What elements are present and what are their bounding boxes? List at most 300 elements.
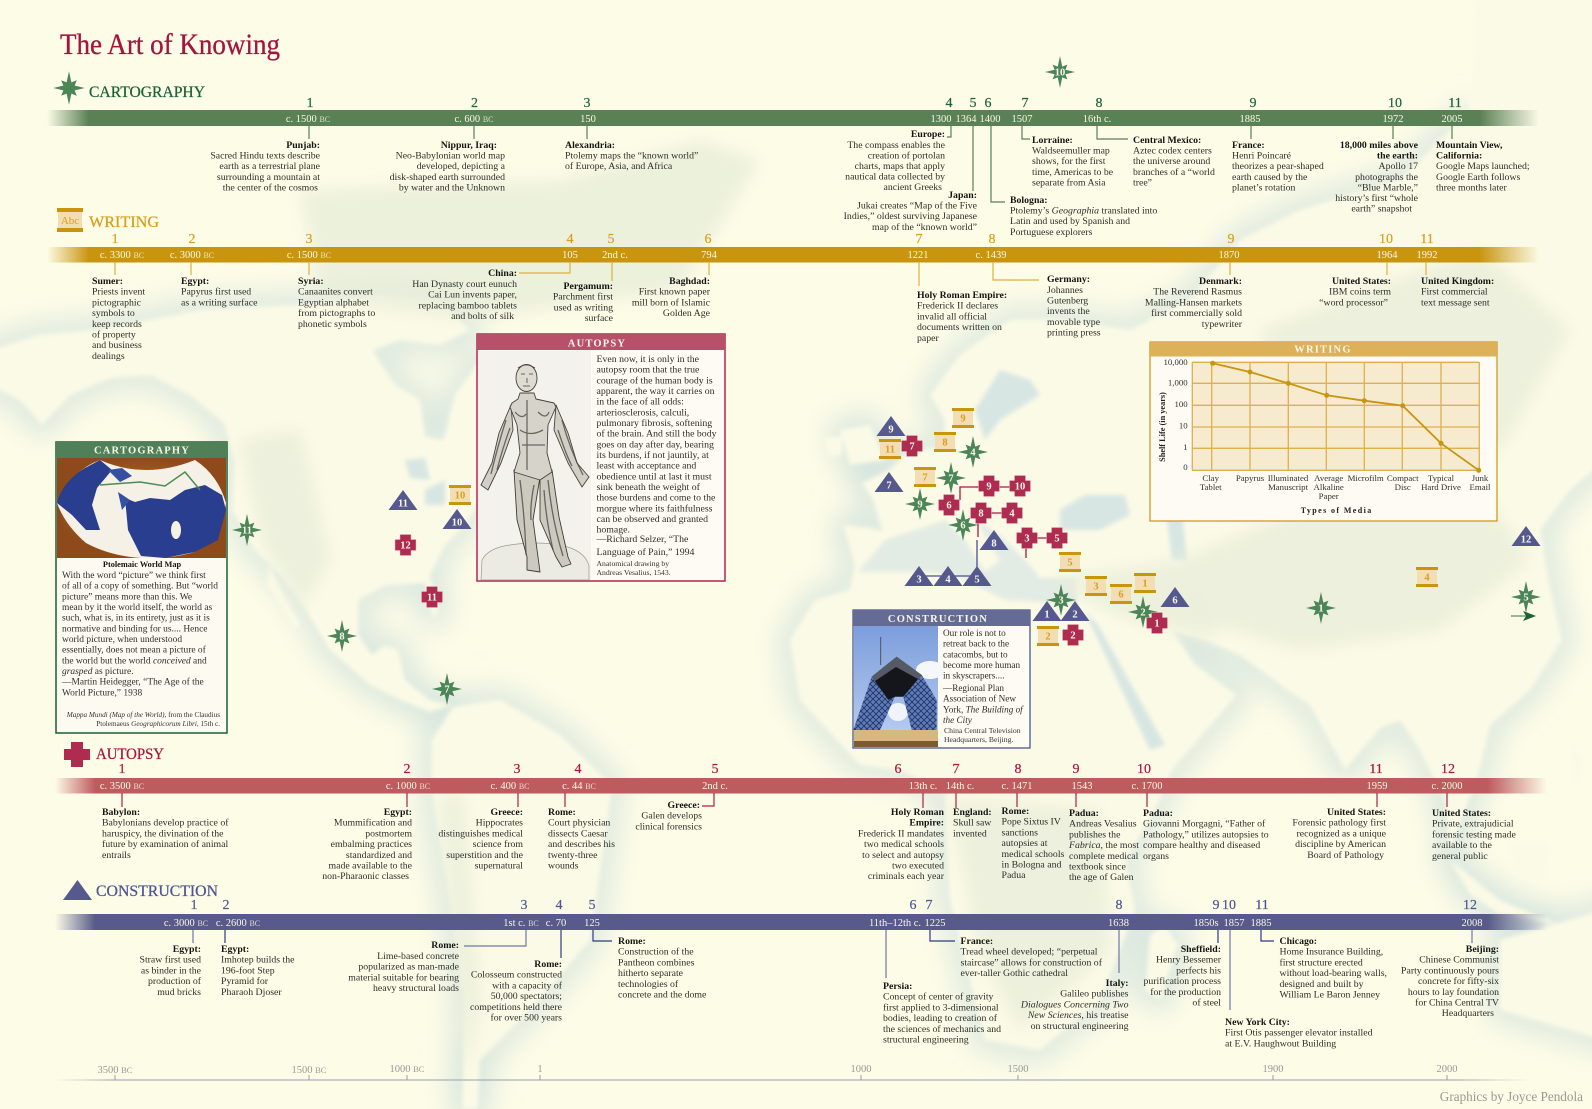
construction triangles: 1 xyxy=(1044,610,1050,620)
event: Persia xyxy=(883,930,1001,1046)
numbers and dates: 11 xyxy=(1369,762,1383,777)
cartography stars: 6 xyxy=(960,520,966,532)
panel header: writing: WRITING xyxy=(1294,344,1352,356)
event: Bologna: Ptolemy’s Geographia translated into xyxy=(1010,206,1157,217)
quote: Selzer: homage. xyxy=(596,525,630,536)
event: Lorraine xyxy=(1022,126,1114,188)
event: Denmark: The Reverend Rasmus xyxy=(1153,287,1242,298)
event: Holy Roman Empire autopsy: Empire: xyxy=(909,818,944,829)
event: United States writing: IBM coins term xyxy=(1329,287,1391,298)
time axis: 3500 BC xyxy=(98,1065,133,1076)
event: Persia: structural engineering xyxy=(883,1034,969,1046)
writing scrolls: 2 xyxy=(1045,632,1051,642)
event: Egypt autopsy: postmortem xyxy=(365,828,412,839)
quote: Regional Plan Association: retreat back to the xyxy=(943,639,1009,649)
event: Chicago xyxy=(1261,930,1387,1000)
event: Beijing: concrete for fifty-six xyxy=(1418,976,1499,987)
event: Padua Morgagni: Giovanni Morgagni, “Father of xyxy=(1143,819,1266,830)
quote: Heidegger: essentially, does not mean a picture of xyxy=(62,645,207,656)
event: Egypt autopsy: standardized and xyxy=(346,850,412,861)
y axis labels: 0 xyxy=(1183,462,1188,472)
panel header: autopsy xyxy=(477,334,725,350)
event: Mountain View: Mountain View, xyxy=(1436,140,1503,151)
quote: Heidegger: World Picture,” 1938 xyxy=(62,688,143,698)
event: Persia: first applied to 3-dimensional xyxy=(883,1002,999,1013)
numbers and dates: 9 xyxy=(1228,232,1234,247)
event: Sheffield: Sheffield: xyxy=(1181,944,1221,955)
event: Bologna: Latin and used by Spanish and xyxy=(1010,216,1130,227)
event: United Kingdom xyxy=(1421,262,1494,308)
event: China: replacing bamboo tablets xyxy=(419,300,517,311)
event: Punjab: Sacred Hindu texts describe xyxy=(210,151,321,162)
event: France: Henri Poincaré xyxy=(1232,151,1292,162)
numbers and dates: 6 xyxy=(984,96,992,111)
event: Greece Galen: clinical forensics xyxy=(635,821,702,832)
x axis labels: Disc xyxy=(1395,482,1411,492)
construction triangles: 10 xyxy=(452,518,462,528)
numbers and dates xyxy=(100,232,1438,261)
event: Holy Roman Empire autopsy: two executed xyxy=(892,860,944,872)
timeline: writing xyxy=(47,208,1539,362)
event: Sheffield xyxy=(1143,930,1222,1008)
event: Egypt straw xyxy=(140,930,202,998)
event: Punjab: Punjab: xyxy=(286,140,320,151)
time axis: 1000 BC xyxy=(390,1064,425,1075)
writing scrolls: 10 xyxy=(455,490,465,502)
numbers and dates: 2 xyxy=(188,232,196,247)
numbers and dates: c. 1471 xyxy=(1002,781,1032,792)
event: Babylon: future by examination of animal xyxy=(102,839,229,850)
numbers and dates: c. 1000 BC xyxy=(386,781,430,792)
construction triangles: 7 xyxy=(886,480,892,492)
time axis: 1500 xyxy=(1008,1064,1028,1075)
numbers and dates: c. 1439 xyxy=(976,250,1006,261)
event: Holy Roman Empire autopsy: to select and autopsy xyxy=(862,850,944,861)
event: Holy Roman Empire autopsy: criminals each year xyxy=(868,871,945,882)
event: Europe: The compass enables the xyxy=(847,140,946,151)
event: Beijing xyxy=(1401,930,1499,1019)
numbers and dates: 1 xyxy=(306,96,314,111)
cartography stars: 10 xyxy=(1055,68,1065,78)
writing scrolls: 11 xyxy=(885,444,895,456)
event: United Kingdom: First commercial xyxy=(1421,287,1488,298)
event: Babylon: entrails xyxy=(102,850,131,861)
heading: cartography: CARTOGRAPHY xyxy=(89,84,205,101)
writing scrolls: 9 xyxy=(960,414,966,424)
numbers and dates: 1st c. BC xyxy=(503,918,539,929)
numbers and dates xyxy=(100,762,1462,792)
event: United States writing: “word processor” xyxy=(1319,297,1388,308)
event: Rome Sixtus: Pope Sixtus IV xyxy=(1002,817,1061,828)
event: Pergamum: surface xyxy=(585,313,614,324)
autopsy crosses: 11 xyxy=(427,592,437,604)
event: Apollo 17: earth” snapshot xyxy=(1351,204,1412,215)
event: Padua Morgagni: Pathology,” utilizes autopsies to xyxy=(1143,829,1269,840)
event: United States pathology: Forensic pathology first xyxy=(1292,818,1386,829)
event: Rome Sixtus: sanctions xyxy=(1002,827,1038,838)
event: Central Mexico: Aztec codex centers xyxy=(1133,146,1212,157)
numbers and dates: c. 1500 BC xyxy=(286,114,330,125)
event: France tread wheel xyxy=(930,930,1103,979)
event: Italy: Italy: xyxy=(1106,978,1128,989)
event: Rome Pantheon: Construction of the xyxy=(618,947,694,958)
event: Egypt straw: as binder in the xyxy=(141,965,202,976)
event: Italy: Dialogues Concerning Two xyxy=(1020,999,1129,1010)
numbers and dates: 1364 xyxy=(956,114,977,125)
numbers and dates: 11 xyxy=(1448,96,1462,111)
event: Lorraine: Waldseemuller map xyxy=(1032,146,1110,157)
event: Egypt Imhotep: 196-foot Step xyxy=(221,965,275,976)
event: Sumer xyxy=(92,262,145,362)
event: Apollo 17: Apollo 17 xyxy=(1379,161,1418,172)
numbers and dates: c. 44 BC xyxy=(562,781,596,792)
event: Germany: Johannes xyxy=(1047,285,1083,296)
event: Padua Vesalius: Andreas Vesalius xyxy=(1069,819,1137,830)
event: Punjab: earth as a terrestrial plane xyxy=(219,161,321,172)
panel: writing chart xyxy=(1150,342,1497,521)
time axis xyxy=(55,1064,1530,1080)
construction triangles: 3 xyxy=(916,574,922,586)
quote: Heidegger: normative and binding for us.... Hence xyxy=(62,623,207,634)
event: Baghdad: First known paper xyxy=(639,287,711,298)
numbers and dates: 5 xyxy=(970,96,976,111)
event: United States forensic testing: forensic testing made xyxy=(1432,829,1516,840)
quote: Regional Plan Association: the City xyxy=(943,715,973,725)
event: Baghdad: Baghdad: xyxy=(669,276,710,287)
event: Rome Sixtus: Rome: xyxy=(1002,806,1029,817)
event: Babylon: Babylonians develop practice of xyxy=(102,818,229,829)
event: United Kingdom: United Kingdom: xyxy=(1421,276,1494,287)
heading: writing xyxy=(57,208,159,232)
numbers and dates: 150 xyxy=(580,114,596,125)
numbers and dates: c. 400 BC xyxy=(491,781,529,792)
event: Mountain View xyxy=(1436,126,1530,193)
event: Egypt autopsy: Egypt: xyxy=(384,807,412,818)
event: Beijing: Headquarters xyxy=(1442,1008,1494,1019)
event: Greece Hippocrates: Hippocrates xyxy=(476,818,523,829)
event: Europe: charts, maps that apply xyxy=(855,161,945,172)
numbers and dates: 3 xyxy=(306,232,312,247)
event: France tread wheel: ever-taller Gothic cathedral xyxy=(960,968,1068,979)
autopsy crosses: 3 xyxy=(1024,534,1030,544)
event: United States forensic testing: United States: xyxy=(1432,808,1491,819)
autopsy crosses: 9 xyxy=(986,482,992,492)
event: Nippur: disk-shaped earth surrounded xyxy=(390,172,505,183)
cartography stars: 7 xyxy=(444,684,450,696)
event: Persia: bodies, leading to creation of xyxy=(883,1013,998,1024)
event: Chicago: without load-bearing walls, xyxy=(1280,968,1387,979)
y axis title: Shelf Life (in years) xyxy=(1158,392,1167,462)
event: Sumer: pictographic xyxy=(92,297,142,308)
event: Chicago: Home Insurance Building, xyxy=(1280,947,1383,958)
quote: Heidegger: picture” means more than this. We xyxy=(62,592,192,602)
event: Rome Colosseum: 50,000 spectators; xyxy=(491,991,562,1002)
numbers and dates: 1857 xyxy=(1224,918,1244,929)
numbers and dates: 14th c. xyxy=(946,781,974,792)
event: China: and bolts of silk xyxy=(451,311,514,322)
autopsy crosses xyxy=(395,436,1168,646)
event: Rome concrete: Lime-based concrete xyxy=(377,951,460,962)
event: Europe xyxy=(845,126,951,193)
event: Nippur: by water and the Unknown xyxy=(399,182,505,193)
event: France: theorizes a pear-shaped xyxy=(1232,161,1324,172)
event: New York City: New York City: xyxy=(1225,1017,1290,1028)
event: Egypt straw: mud bricks xyxy=(157,987,201,998)
event: Greece Hippocrates: distinguishes medical xyxy=(438,828,523,839)
numbers and dates: 9 xyxy=(1212,898,1220,913)
heading: writing: WRITING xyxy=(89,214,159,231)
event: Rome Pantheon xyxy=(593,930,707,1000)
event: Bologna: Bologna: xyxy=(1010,195,1048,206)
panel: construction xyxy=(853,610,1030,748)
numbers and dates: 10 xyxy=(1379,232,1393,247)
event: United States forensic testing: general public xyxy=(1432,851,1488,862)
event: Egypt straw: Straw first used xyxy=(140,955,201,966)
time axis: 1900 xyxy=(1262,1064,1284,1075)
event: Rome Colosseum: Colosseum constructed xyxy=(471,970,562,981)
event: Greece Galen: Galen develops xyxy=(641,811,702,822)
event: Germany: Gutenberg xyxy=(1047,296,1088,306)
numbers and dates: 5 xyxy=(588,898,596,913)
timeline: autopsy xyxy=(55,742,1547,883)
event: Bologna: Portuguese explorers xyxy=(1010,227,1093,238)
event: United States writing: United States: xyxy=(1332,276,1391,287)
event: Chicago: Chicago: xyxy=(1280,936,1317,947)
quote: Heidegger: of all of a copy of something. But “world xyxy=(62,581,218,592)
autopsy crosses: 1 xyxy=(1154,618,1160,630)
event: Rome concrete: Rome: xyxy=(431,940,459,951)
event: Padua Morgagni: Padua: xyxy=(1143,808,1173,819)
construction triangles: 11 xyxy=(398,498,408,510)
numbers and dates: 1400 xyxy=(980,114,1000,125)
event: New York City: First Otis passenger elevator installed xyxy=(1225,1028,1373,1039)
event: Persia: Persia: xyxy=(883,981,912,992)
time axis: 1500 BC xyxy=(292,1065,327,1076)
event: Sheffield: Henry Bessemer xyxy=(1156,955,1222,966)
quote: Selzer: Even now, it is only in the xyxy=(596,354,700,365)
panel header: cartography xyxy=(56,442,227,458)
time axis: 1 xyxy=(537,1064,543,1075)
event: Rome Caesar: wounds xyxy=(548,860,579,872)
numbers and dates: 2 xyxy=(471,96,478,111)
quote: Selzer: apparent, the way it carries on xyxy=(596,386,715,397)
numbers and dates: 2008 xyxy=(1462,918,1482,929)
quote: Regional Plan Association: become more human xyxy=(943,660,1020,670)
autopsy crosses: 4 xyxy=(1009,508,1015,520)
event: Rome Sixtus: medical schools xyxy=(1002,849,1065,860)
x axis labels: Paper xyxy=(1319,491,1339,501)
event: Denmark xyxy=(1145,262,1243,330)
quote: Selzer: courage of the human body is xyxy=(596,375,713,386)
image: Ptolemaic world map xyxy=(57,458,226,558)
quote: Heidegger: With the word “picture” we think first xyxy=(62,570,206,581)
event: Europe: Europe: xyxy=(911,129,945,140)
numbers and dates: 1959 xyxy=(1366,781,1388,792)
event: Holy Roman Empire writing: invalid all official xyxy=(917,311,987,322)
caption: CCTV: China Central Television xyxy=(944,726,1021,735)
event: Padua Vesalius: Padua: xyxy=(1069,808,1099,819)
event: Sumer: and business xyxy=(92,340,142,351)
numbers and dates: 1964 xyxy=(1376,250,1398,261)
event: Europe: creation of portolan xyxy=(868,150,945,161)
event: Sheffield: purification process xyxy=(1143,976,1221,987)
event: Lorraine: separate from Asia xyxy=(1032,177,1106,188)
event: Germany: Germany: xyxy=(1047,274,1090,285)
quote: Regional Plan Association: in skyscrapers.... xyxy=(943,671,1004,681)
quote: Selzer: sink beneath the weight of xyxy=(596,482,701,493)
numbers and dates: 8 xyxy=(1096,96,1102,111)
event: Rome concrete: material suitable for bearing xyxy=(348,972,459,983)
numbers and dates: 10 xyxy=(1388,96,1402,111)
event: Greece Galen xyxy=(635,793,714,832)
event: Syria: Egyptian alphabet xyxy=(298,297,369,308)
numbers and dates: 12 xyxy=(1441,762,1455,777)
event: Nippur: Nippur, Iraq: xyxy=(441,140,497,151)
event: Japan: Japan: xyxy=(948,190,977,201)
event: Holy Roman Empire autopsy xyxy=(858,793,945,882)
event: Apollo 17: the earth: xyxy=(1377,151,1418,162)
numbers and dates: 2 xyxy=(222,898,230,913)
quote: Regional Plan Association: catacombs, but to xyxy=(943,649,1008,659)
event: Greece Hippocrates xyxy=(438,793,524,872)
construction triangles: 2 xyxy=(1072,610,1078,620)
quote: Selzer: of the brain. And still the body xyxy=(596,429,717,440)
numbers and dates: 7 xyxy=(916,232,922,247)
cartography stars: 1 xyxy=(1318,604,1324,614)
numbers and dates: 11 xyxy=(1255,898,1269,913)
event: Apollo 17: history’s first “whole xyxy=(1335,193,1419,204)
numbers and dates: c. 2600 BC xyxy=(216,918,260,929)
event: Germany: invents the xyxy=(1047,306,1090,317)
event: Rome concrete: heavy structural loads xyxy=(373,983,459,994)
numbers and dates: 794 xyxy=(701,250,718,261)
event: Egypt Imhotep: Imhotep builds the xyxy=(221,955,295,966)
y axis labels xyxy=(1163,357,1188,472)
event: Holy Roman Empire autopsy: two medical schools xyxy=(864,839,944,850)
numbers and dates: 2nd c. xyxy=(602,250,628,261)
event: Padua Morgagni: compare healthy and diseased xyxy=(1143,840,1260,851)
construction triangles: 12 xyxy=(1521,534,1531,546)
event: Sumer: Sumer: xyxy=(92,276,123,287)
event: Egypt straw: Egypt: xyxy=(173,944,201,955)
heading: autopsy xyxy=(64,742,164,767)
event: Greece Hippocrates: science from xyxy=(473,839,523,850)
event: Europe: nautical data collected by xyxy=(845,172,945,183)
quote: Selzer: Language of Pain,” 1994 xyxy=(596,547,695,558)
event: Rome Caesar xyxy=(548,793,615,872)
event: Babylon: haruspicy, the divination of the xyxy=(102,828,224,839)
bar: autopsy xyxy=(55,778,1547,794)
numbers and dates: 4 xyxy=(566,232,574,247)
inland seas xyxy=(405,370,1230,750)
credit: Graphics by Joyce Pendola xyxy=(1440,1089,1583,1104)
cartography stars: 8 xyxy=(339,632,345,642)
event: Rome concrete xyxy=(348,930,526,994)
event: Beijing: for China Central TV xyxy=(1415,998,1499,1008)
event: United States forensic testing: available to the xyxy=(1432,840,1492,851)
numbers and dates: 8 xyxy=(1116,898,1122,913)
event: Europe: ancient Greeks xyxy=(884,182,942,193)
event: Chicago: designed and built by xyxy=(1280,979,1364,990)
event: Egypt autopsy: non-Pharaonic classes xyxy=(322,871,409,882)
panel: autopsy xyxy=(477,334,725,581)
x axis labels: Average xyxy=(1314,473,1343,483)
event: France: France: xyxy=(1232,140,1265,151)
x axis labels: Microfilm xyxy=(1348,473,1384,483)
event: Syria xyxy=(298,262,375,330)
event: Lorraine: time, Americas to be xyxy=(1032,167,1114,178)
writing scrolls: 4 xyxy=(1424,572,1430,584)
event: Pergamum: Pergamum: xyxy=(563,281,613,292)
x axis labels: Clay xyxy=(1202,473,1220,483)
event: Persia: Concept of center of gravity xyxy=(883,992,994,1003)
image: anatomical figure xyxy=(478,351,591,580)
event: Egypt Imhotep xyxy=(221,930,295,998)
y axis labels: 1,000 xyxy=(1168,378,1188,388)
event: Chicago: William Le Baron Jenney xyxy=(1280,990,1380,1000)
event: Central Mexico: Central Mexico: xyxy=(1133,135,1201,146)
event: Beijing: Beijing: xyxy=(1466,944,1499,955)
event: Alexandria xyxy=(565,126,698,172)
event: Rome Caesar: twenty-three xyxy=(548,850,598,861)
caption: Vesalius: Anatomical drawing by xyxy=(596,559,669,568)
event: China xyxy=(412,262,570,322)
event: Padua Vesalius: the age of Galen xyxy=(1069,872,1134,883)
numbers and dates: 10 xyxy=(1137,762,1151,777)
numbers and dates: 1 xyxy=(112,232,118,247)
event: Italy xyxy=(1020,930,1129,1032)
quote: Regional Plan Association: Association of New xyxy=(943,694,1016,704)
event: Beijing: Party continuously pours xyxy=(1401,965,1499,976)
quote: Selzer: its burdens, if not jauntily, at xyxy=(596,450,709,461)
event: Apollo 17 xyxy=(1335,126,1419,215)
event: Syria: Canaanites convert xyxy=(298,287,373,298)
event: Alexandria: of Europe, Asia, and Africa xyxy=(565,161,673,172)
quote: Heidegger: mean by it the world itself, the world as xyxy=(62,602,213,613)
x axis labels xyxy=(1200,473,1491,501)
event: Egypt autopsy xyxy=(322,793,413,882)
numbers and dates: 1885 xyxy=(1250,918,1272,929)
cartography stars xyxy=(232,56,1541,705)
quote: Selzer: pulmonary fibrosis, softening xyxy=(596,418,712,429)
event: Pergamum: Parchment first xyxy=(553,292,613,303)
writing scrolls: 6 xyxy=(1118,590,1124,600)
event: Rome Sixtus xyxy=(1002,793,1065,881)
event: Egypt writing: Egypt: xyxy=(181,276,209,287)
event: Rome Pantheon: Pantheon combines xyxy=(618,957,695,968)
cartography stars: 2 xyxy=(1140,608,1146,618)
x axis labels: Papyrus xyxy=(1236,473,1265,483)
event: Alexandria: Ptolemy maps the “known world” xyxy=(565,151,698,162)
event: Beijing: hours to lay foundation xyxy=(1408,987,1499,998)
event: Greece Hippocrates: superstition and the xyxy=(446,850,524,861)
event: Rome Pantheon: Rome: xyxy=(618,936,646,947)
event: Rome Caesar: dissects Caesar xyxy=(548,828,608,839)
heading: autopsy: AUTOPSY xyxy=(96,746,164,763)
writing scrolls: 5 xyxy=(1067,558,1073,568)
timeline: construction xyxy=(55,880,1547,1049)
caption: Vesalius: Andreas Vesalius, 1543. xyxy=(596,568,671,577)
event: France: planet’s rotation xyxy=(1232,182,1295,193)
construction triangles: 5 xyxy=(974,574,980,586)
numbers and dates: 12 xyxy=(1463,898,1477,913)
event: England: England: xyxy=(953,807,992,818)
event: Central Mexico xyxy=(1097,126,1215,188)
writing scrolls: 1 xyxy=(1142,578,1148,590)
quote: Heidegger: grasped as picture. xyxy=(62,667,134,677)
event: Denmark: Denmark: xyxy=(1199,276,1242,287)
event: Egypt autopsy: embalming practices xyxy=(331,839,412,850)
